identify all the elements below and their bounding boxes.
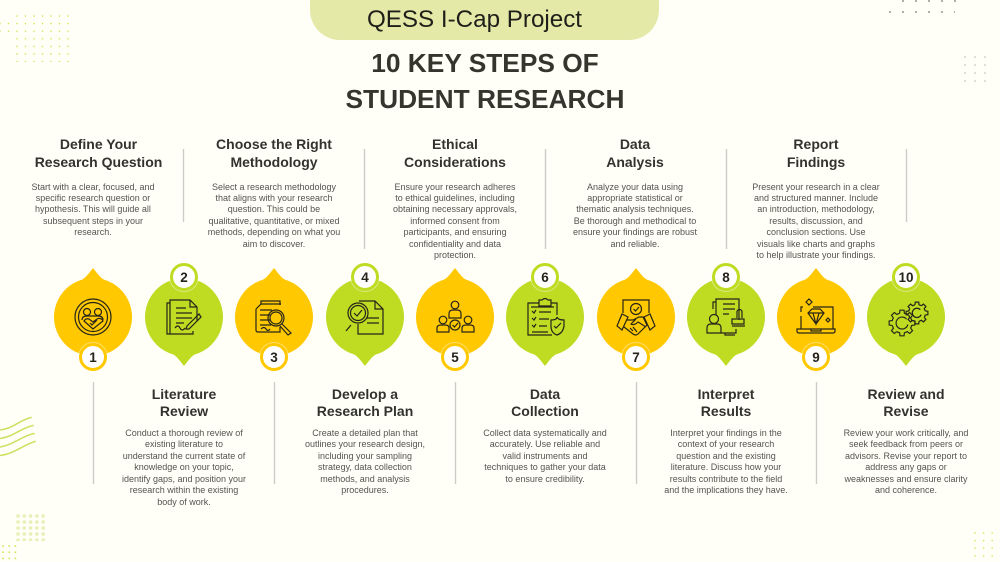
- heading: step 9: Report: [793, 136, 839, 152]
- text: step 5: [393, 182, 517, 260]
- text: step 7: Be thorough and methodical to: [574, 216, 696, 226]
- icon: document and pencil: [167, 300, 201, 334]
- text: step 9: an introduction, methodology,: [757, 204, 875, 214]
- text: step 5: informed consent from: [410, 216, 500, 226]
- text: step 7: [573, 182, 697, 249]
- title: STUDENT RESEARCH: [345, 84, 625, 114]
- text: step 3: methods, depending on what you: [208, 227, 340, 237]
- text: step 9: Present your research in a clear: [752, 182, 880, 192]
- text: step 6: valid instruments and: [502, 451, 588, 461]
- step 4 marker: [326, 262, 404, 366]
- text: step 4: outlines your research design,: [305, 439, 425, 449]
- icon: circle badge with people and heart: [75, 299, 111, 335]
- text: step 6: to ensure credibility.: [505, 474, 585, 484]
- text: step 8: literature. Discuss how your: [671, 462, 781, 472]
- step 1 marker: [54, 268, 132, 372]
- text: step 2: Conduct a thorough review of: [125, 428, 243, 438]
- text: step 9: to help illustrate your findings.: [756, 250, 876, 260]
- text: step 9: [752, 182, 880, 260]
- heading: step 1: Define Your: [60, 136, 137, 152]
- text: step 5: to ethical guidelines, including: [395, 193, 515, 203]
- text: step 10: [844, 428, 968, 495]
- icon: laptop with diamond: [797, 299, 835, 333]
- step 7 marker: [597, 268, 675, 372]
- text: step 2: body of work.: [157, 497, 211, 507]
- heading: step 2: Literature: [152, 386, 216, 402]
- heading: step 6: Collection: [511, 403, 579, 419]
- text: step 1: [31, 182, 155, 237]
- icon: person, papers and stamp: [707, 299, 745, 335]
- text: step 9: results, discussion, and: [769, 216, 863, 226]
- text: step 6: [483, 428, 607, 484]
- title: [345, 48, 625, 114]
- heading: step 1: [35, 136, 162, 170]
- text: step 8: results contribute to the field: [670, 474, 782, 484]
- text: step 10: address any gaps or: [865, 462, 947, 472]
- text: step 5: obtaining necessary approvals,: [393, 204, 517, 214]
- heading: step 9: Findings: [787, 154, 845, 170]
- heading: step 8: Results: [701, 403, 751, 419]
- icon: clipboard checklist with shield: [528, 298, 564, 335]
- text: step 6: accurately. Use reliable and: [490, 439, 600, 449]
- text: step 8: [664, 428, 788, 495]
- text: step 5: participants, and ensuring: [403, 227, 507, 237]
- text: step 7: ensure your findings are robust: [573, 227, 697, 237]
- step 10 marker: 10: [898, 270, 914, 285]
- header pill: [310, 0, 659, 40]
- text: step 10: advisors. Revise your report to: [845, 451, 967, 461]
- text: step 5: protection.: [434, 250, 476, 260]
- heading: step 5: Considerations: [404, 154, 506, 170]
- text: step 1: research.: [74, 227, 112, 237]
- step 8 marker: [687, 262, 765, 366]
- text: step 4: strategy, data collection: [318, 462, 412, 472]
- heading: step 7: Analysis: [606, 154, 664, 170]
- heading: step 8: Interpret: [698, 386, 754, 402]
- heading: step 5: Ethical: [432, 136, 478, 152]
- text: step 3: qualitative, quantitative, or mixed: [208, 216, 340, 226]
- text: step 10: and coherence.: [875, 485, 937, 495]
- heading: step 4: [317, 386, 413, 419]
- text: step 3: question. This could be: [228, 204, 320, 214]
- title: 10 KEY STEPS OF: [371, 48, 599, 78]
- text: step 10: weaknesses and ensure clarity: [844, 474, 968, 484]
- heading: step 3: Methodology: [230, 154, 318, 170]
- step 6 marker: [506, 262, 584, 366]
- heading: step 3: Choose the Right: [216, 136, 332, 152]
- text: step 8: and the implications they have.: [664, 485, 788, 495]
- text: step 5: Ensure your research adheres: [394, 182, 516, 192]
- text: step 4: including your sampling: [318, 451, 412, 461]
- icon: two gears: [889, 302, 928, 336]
- icon: team of three: [437, 301, 474, 332]
- icon: magnifier over document: [346, 301, 383, 334]
- heading: step 8: [698, 386, 754, 419]
- text: step 8: question and the existing: [676, 451, 776, 461]
- text: step 7: and reliable.: [610, 239, 660, 249]
- text: step 9: conclusion sections. Use: [766, 227, 866, 237]
- heading: step 10: Review and: [867, 386, 945, 402]
- heading: step 7: Data: [620, 136, 650, 152]
- text: step 7: appropriate statistical or: [587, 193, 683, 203]
- text: step 1: hypothesis. This will guide all: [35, 204, 151, 214]
- step 5 marker: 5: [451, 350, 459, 365]
- heading: step 6: [511, 386, 579, 419]
- heading: step 5: [404, 136, 506, 170]
- text: step 4: [305, 428, 425, 495]
- text: step 6: Collect data systematically and: [483, 428, 607, 438]
- step 2 marker: [145, 262, 223, 366]
- step 6 marker: 6: [541, 270, 549, 285]
- step 1 marker: 1: [89, 350, 97, 365]
- text: step 10: Review your work critically, and: [844, 428, 968, 438]
- heading: step 4: Develop a: [332, 386, 398, 402]
- heading: step 9: [787, 136, 845, 170]
- text: step 2: knowledge on your topic,: [134, 462, 234, 472]
- text: step 5: confidentiality and data: [409, 239, 501, 249]
- step 9 marker: 9: [812, 350, 820, 365]
- step 2 marker: 2: [180, 270, 188, 285]
- text: step 9: and structured manner. Include: [754, 193, 878, 203]
- heading: step 10: [867, 386, 945, 419]
- text: step 3: that aligns with your research: [215, 193, 333, 203]
- heading: step 3: [216, 136, 332, 170]
- text: step 2: existing literature to: [145, 439, 223, 449]
- icon: handshake with check: [617, 300, 655, 335]
- text: step 1: specific research question or: [36, 193, 150, 203]
- text: step 6: techniques to gather your data: [484, 462, 606, 472]
- text: step 10: seek feedback from peers or: [849, 439, 963, 449]
- text: step 2: research within the existing: [130, 485, 238, 495]
- heading: step 7: [606, 136, 664, 170]
- step 3 marker: [235, 268, 313, 372]
- heading: step 4: Research Plan: [317, 403, 413, 419]
- text: step 1: subsequent steps in your: [43, 216, 143, 226]
- heading: step 2: Review: [160, 403, 208, 419]
- step 9 marker: [777, 268, 855, 372]
- project name: QESS I-Cap Project: [367, 6, 582, 33]
- text: step 7: thematic analysis techniques.: [576, 204, 694, 214]
- step 7 marker: 7: [632, 350, 640, 365]
- step 4 marker: 4: [361, 270, 369, 285]
- text: step 4: Create a detailed plan that: [312, 428, 418, 438]
- heading: step 2: [152, 386, 216, 419]
- text: step 8: context of your research: [678, 439, 774, 449]
- text: step 3: aim to discover.: [243, 239, 305, 249]
- icon: document with magnifier: [256, 301, 291, 335]
- text: step 4: procedures.: [341, 485, 389, 495]
- text: step 7: Analyze your data using: [587, 182, 683, 192]
- text: step 2: identify gaps, and position your: [122, 474, 246, 484]
- text: step 8: Interpret your findings in the: [670, 428, 782, 438]
- text: step 2: [122, 428, 246, 507]
- text: step 9: visuals like charts and graphs: [757, 239, 875, 249]
- heading: step 10: Revise: [883, 403, 929, 419]
- step 8 marker: 8: [722, 270, 730, 285]
- text: step 3: [208, 182, 340, 249]
- text: step 1: Start with a clear, focused, and: [31, 182, 155, 192]
- text: step 2: understand the current state of: [123, 451, 245, 461]
- text: step 3: Select a research methodology: [212, 182, 336, 192]
- step 3 marker: 3: [270, 350, 278, 365]
- step 10 marker: [867, 262, 945, 366]
- heading: step 6: Data: [530, 386, 560, 402]
- heading: step 1: Research Question: [35, 154, 162, 170]
- step 5 marker: [416, 268, 494, 372]
- text: step 4: methods, and analysis: [320, 474, 410, 484]
